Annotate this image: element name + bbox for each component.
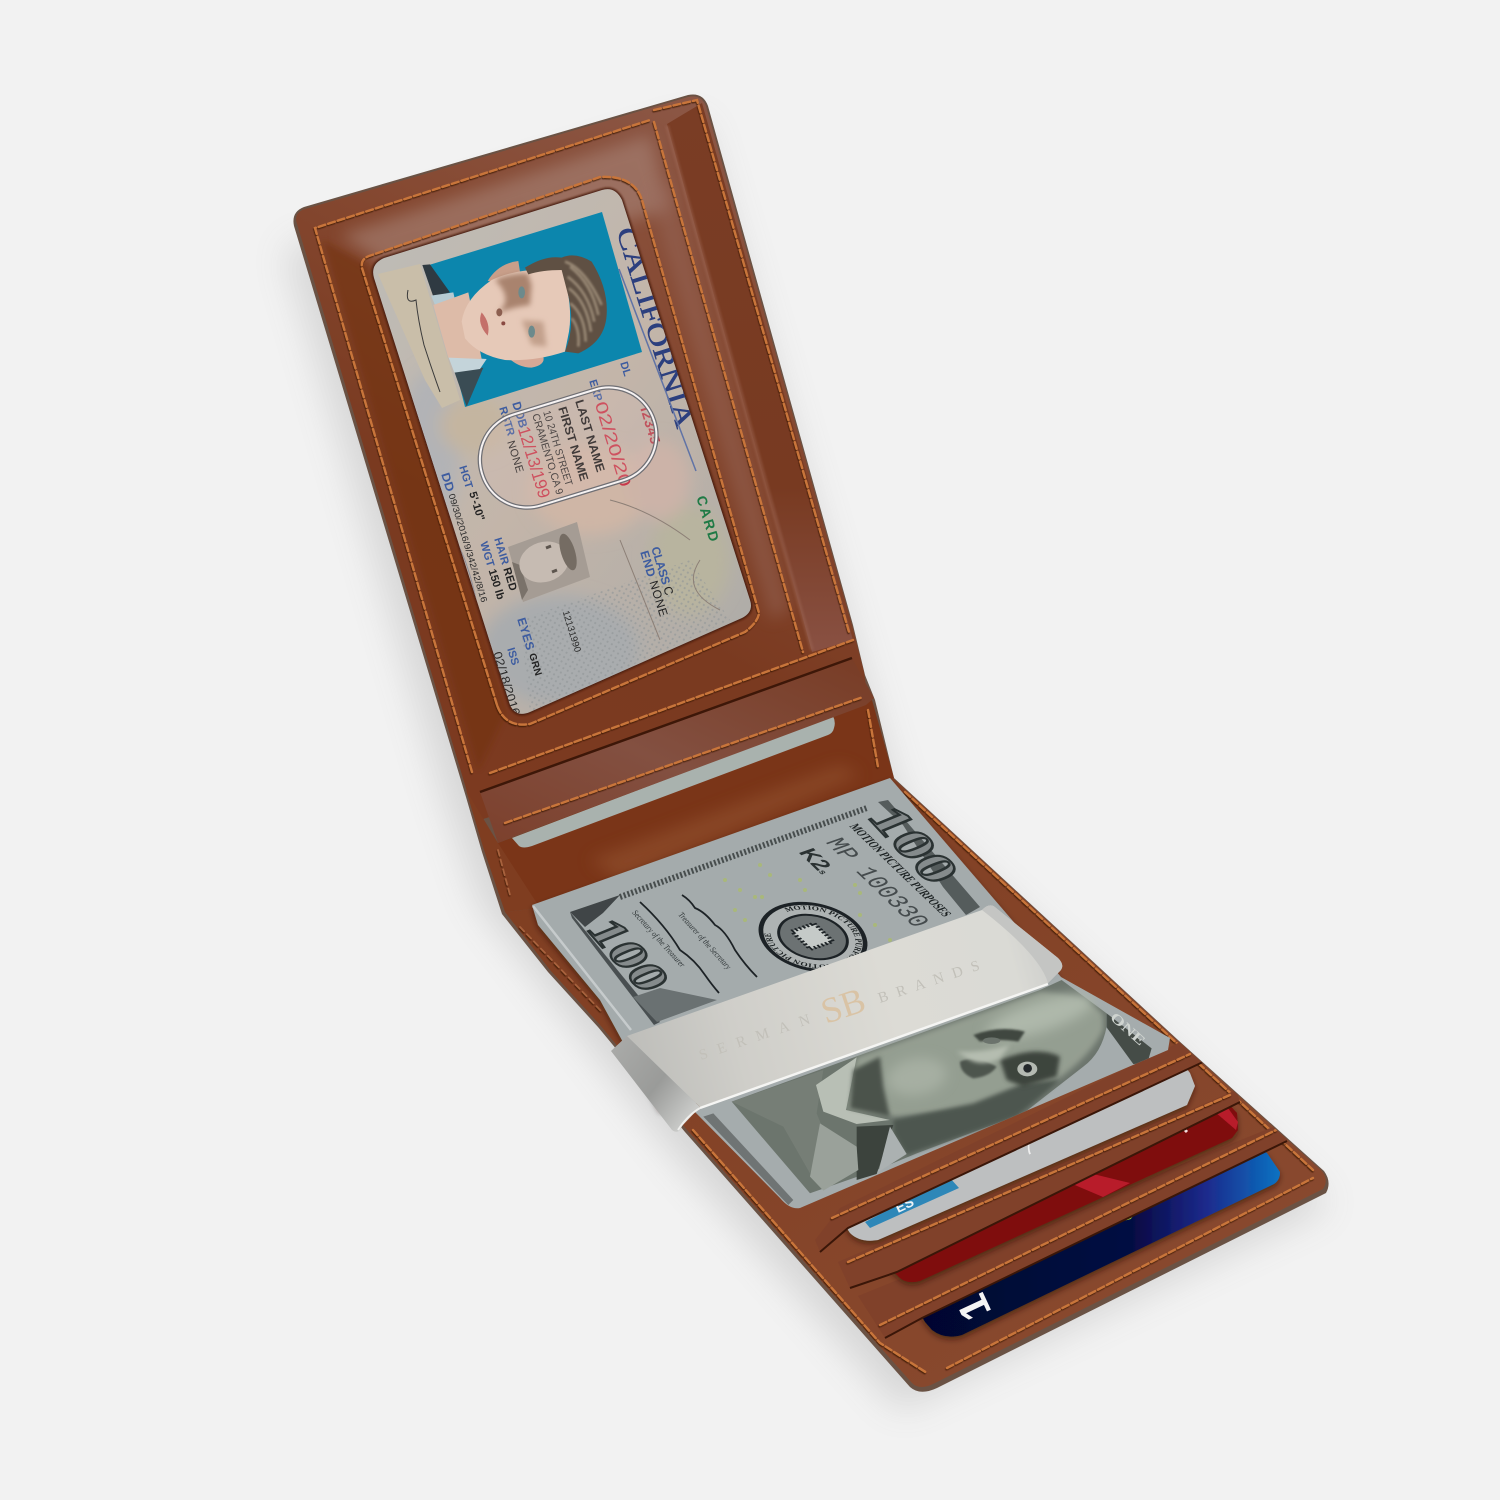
card pastel patches: [400, 370, 730, 705]
suit dark upper: [422, 264, 450, 297]
pockets and cards group: [693, 1042, 1313, 1373]
ghost head: [519, 542, 567, 582]
suit dark lower: [454, 368, 483, 407]
title: California: CALIFORNIA: [611, 224, 700, 432]
fold shadow: [703, 1113, 793, 1205]
interior right stitch: [868, 710, 878, 767]
shirt upper: [431, 292, 455, 305]
seal: [758, 902, 868, 971]
stitching: [315, 100, 1313, 1170]
DD line: DD 09/30/2016/9/342/42/8/16: [438, 471, 491, 604]
cravat and hair light: [816, 1057, 890, 1124]
green arc: [1118, 1210, 1133, 1219]
clip lower edge highlight: [700, 984, 1048, 1108]
left 100: 100: [575, 912, 682, 998]
hair field: HAIR RED: [491, 536, 519, 592]
DOB date: 12/13/199: [514, 424, 554, 501]
number code: 12131990: [560, 609, 583, 654]
class field: CLASS C: [648, 545, 676, 597]
left eye: [983, 1037, 1000, 1044]
nose: [496, 308, 502, 316]
hair: [525, 255, 607, 353]
brand: Serman: SERMAN: [697, 1012, 812, 1064]
hair highlights: [565, 262, 602, 347]
band 3 stitch: [880, 1130, 1276, 1325]
forehead and face: [847, 992, 1103, 1117]
restriction value: NONE: [504, 439, 525, 474]
left dark edge: [570, 912, 660, 1025]
interior leather sheen: [590, 765, 860, 880]
pocket 2 slit: [850, 1102, 1240, 1288]
lower right stitch: [905, 792, 1313, 1170]
printed portrait area: [732, 980, 1107, 1193]
weight field: WGT 150 lb: [477, 540, 506, 601]
DL digits: I2345: [637, 405, 664, 446]
pocket 3 slit: [885, 1141, 1287, 1338]
left corner ornament: [570, 895, 620, 927]
end field: END NONE: [637, 549, 671, 618]
band stitch: [490, 640, 853, 773]
K2 mark: K2s: [793, 845, 841, 877]
clip fold end: [611, 1036, 700, 1132]
grey card blue stripe: [865, 1178, 959, 1228]
last name: LAST NAME: [572, 398, 608, 474]
DOB label: DOB: [509, 400, 531, 430]
height label: HGT: [456, 464, 475, 490]
shirt lower: [448, 357, 487, 373]
green micro marks: [723, 863, 892, 942]
band 2 stitch: [848, 1095, 1230, 1262]
nose highlight: [957, 1045, 1010, 1063]
ID window rim: [373, 189, 751, 714]
pocket 1 slit: [820, 1062, 1203, 1252]
side pocket stitch: [654, 122, 803, 652]
lower left faint stitch: [520, 927, 603, 1013]
forehead highlight: [981, 985, 1098, 1048]
ghost eyes: [546, 546, 557, 572]
treasurer caption: Treasurer of the Secretary: [677, 910, 734, 971]
first name: FIRST NAME: [555, 405, 591, 483]
wallet product illustration: [284, 94, 1329, 1410]
red card: [880, 1100, 1238, 1282]
grey card in hinge slot: [512, 716, 835, 848]
brow: [973, 1029, 1025, 1042]
EXP date: 02/20/20: [591, 399, 635, 489]
eye socket: [1000, 1052, 1060, 1087]
left pocket stitch: [693, 1130, 927, 1373]
DL number: DL: [617, 360, 633, 378]
left darker leather border: [322, 240, 505, 770]
outer flap stitch: [315, 120, 650, 772]
brand: Brands: BRANDS: [876, 958, 982, 1007]
eyes field: EYES GRN: [514, 616, 545, 677]
panel: upper ID flap: [296, 96, 868, 820]
shadow across brow and nose: [495, 273, 532, 313]
eye lower: [528, 326, 535, 338]
map line right: [610, 500, 720, 640]
red card stripe: [1070, 1172, 1130, 1197]
coat: [732, 1070, 823, 1173]
window stitch: [362, 177, 759, 725]
hologram highlight: [468, 376, 668, 519]
motion picture text: MOTION PICTURE PURPOSES: [846, 822, 955, 918]
neck: [433, 292, 482, 359]
height value: 5'-10": [466, 490, 486, 522]
grey card digit: 7: [1019, 1136, 1038, 1161]
upper bill: [530, 778, 1062, 1116]
lips: [480, 312, 489, 336]
serial number: MP 100330: [817, 835, 936, 931]
left leather sliver: [466, 790, 540, 912]
issue label: ISS: [504, 646, 521, 667]
clip tip: [982, 905, 1062, 983]
clip curl highlight: [678, 1108, 700, 1130]
blue card numeral: 1: [948, 1287, 1000, 1328]
leather sheen at top: [340, 135, 670, 275]
seal shield: [792, 923, 833, 949]
bottom stitch: [947, 1178, 1313, 1368]
restriction label: RSTR: [496, 405, 517, 437]
pocket band 2: [838, 1090, 1240, 1288]
seal text: MOTION PICTURE PURPOSES MOTION PICTURE: [764, 906, 862, 968]
photo blue backdrop: [429, 212, 642, 407]
wallet outer edge: [293, 94, 1329, 1392]
ear upper: [488, 261, 520, 282]
lower left hatch: [633, 988, 717, 1022]
city line: CRAMENTO,CA 9: [529, 412, 565, 496]
right hatch strip: [878, 800, 980, 915]
band 1 stitch: [832, 1054, 1190, 1218]
issue date: 02/18/2016: [490, 650, 523, 718]
hair dark: [850, 1057, 890, 1117]
money clip: [611, 905, 1062, 1132]
denomination band: [1107, 1013, 1152, 1064]
eye white: [1017, 1062, 1037, 1076]
lower bill paper: [680, 970, 1180, 1220]
card label: CARD: [693, 494, 722, 543]
eye upper: [518, 286, 525, 298]
panel: lower leather body: [505, 778, 1326, 1387]
pocket band 3: [858, 1122, 1289, 1338]
dot guilloche lower: [520, 560, 730, 712]
head: [462, 268, 570, 360]
soft shadow under wallet: [285, 120, 1330, 1410]
blue card: [912, 1140, 1280, 1337]
shadow lower eye: [522, 320, 547, 347]
bill left edge highlight: [533, 906, 631, 1030]
ghost hair: [559, 534, 577, 570]
red card marks: [1065, 1128, 1187, 1184]
denomination text: ONE: [1107, 1010, 1148, 1049]
card base: [373, 189, 751, 714]
ghost coat: [512, 562, 528, 600]
grey card: [840, 1060, 1195, 1241]
EXP label: EXP: [586, 378, 604, 403]
nostril mark: [501, 321, 505, 325]
pupil: [1023, 1064, 1032, 1073]
red corner stripe: [1215, 1108, 1238, 1130]
map line left: [459, 546, 478, 602]
right side pocket strip: [667, 103, 853, 652]
leather sheen right of window: [650, 180, 790, 620]
lower bill with portrait: [680, 970, 1180, 1220]
signature box: [378, 264, 460, 408]
dark coat: [857, 1125, 893, 1180]
signature: [407, 290, 440, 392]
seam line: [480, 658, 852, 792]
signature secretary: [640, 902, 719, 993]
hinge pocket band: [480, 658, 874, 843]
cheek highlight: [884, 1053, 949, 1100]
ID card in window: [373, 189, 751, 714]
secretary caption: Secretary of the Treasurer: [631, 908, 688, 970]
person, drawn in zoomed coordinates: [422, 255, 607, 407]
stripe lettering: ES: [893, 1193, 916, 1216]
nose: [960, 1059, 997, 1078]
seal ring: [765, 907, 861, 967]
bill serrated border: [620, 808, 867, 897]
pocket stitching: [693, 1054, 1313, 1373]
address line: 10 24TH STREET: [540, 409, 575, 488]
signature treasurer: [682, 895, 757, 977]
collar ruffle: [810, 1123, 858, 1191]
hinge stitch: [505, 697, 863, 823]
portrait photo: [422, 212, 642, 407]
white shard: [878, 1127, 907, 1172]
title underline: [619, 269, 696, 471]
brand logo: SB: [816, 980, 870, 1032]
small ghost photo: [508, 522, 590, 602]
outer right stitch: [654, 100, 849, 632]
right 100: 100: [856, 799, 972, 890]
pocket band 1: [815, 1042, 1203, 1252]
clip front plate: [627, 905, 1062, 1107]
ear lower: [508, 357, 544, 368]
panel: lower interior behind bill: [498, 700, 894, 908]
strip crease: [667, 126, 812, 650]
interior left stitch: [498, 850, 510, 895]
jaw shadow: [893, 1080, 1060, 1155]
hologram oval: [468, 376, 668, 519]
portrait engraving, drawn in zoomed coordinates: [703, 980, 1152, 1205]
